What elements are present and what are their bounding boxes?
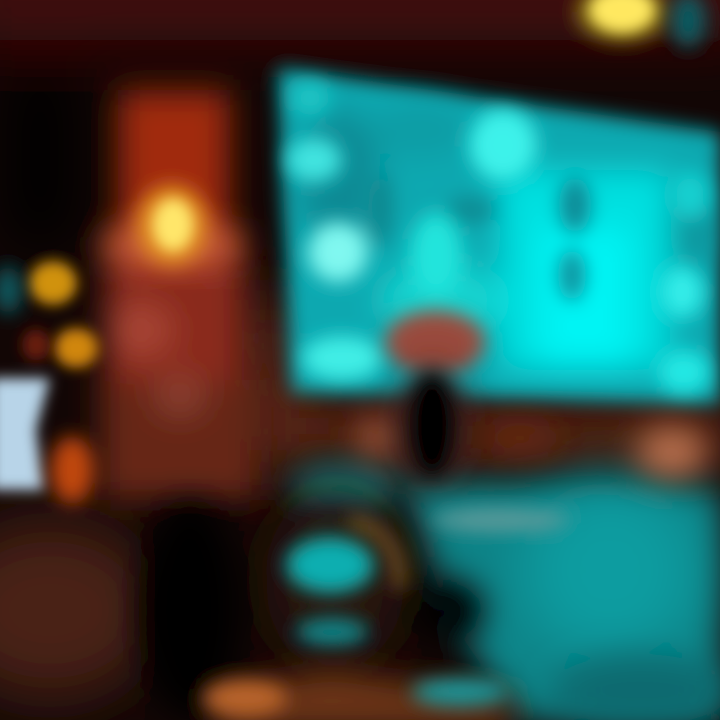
table foreground — [140, 500, 510, 720]
red wall column — [100, 90, 260, 500]
teal floor reflection — [290, 464, 720, 720]
wall lamp — [97, 185, 247, 267]
peach reflections — [358, 416, 708, 478]
ceiling light — [576, 0, 706, 48]
left side lights — [0, 261, 98, 504]
person silhouette — [385, 310, 485, 483]
glass with teal highlights — [265, 490, 405, 670]
large cyan screen — [278, 68, 720, 404]
